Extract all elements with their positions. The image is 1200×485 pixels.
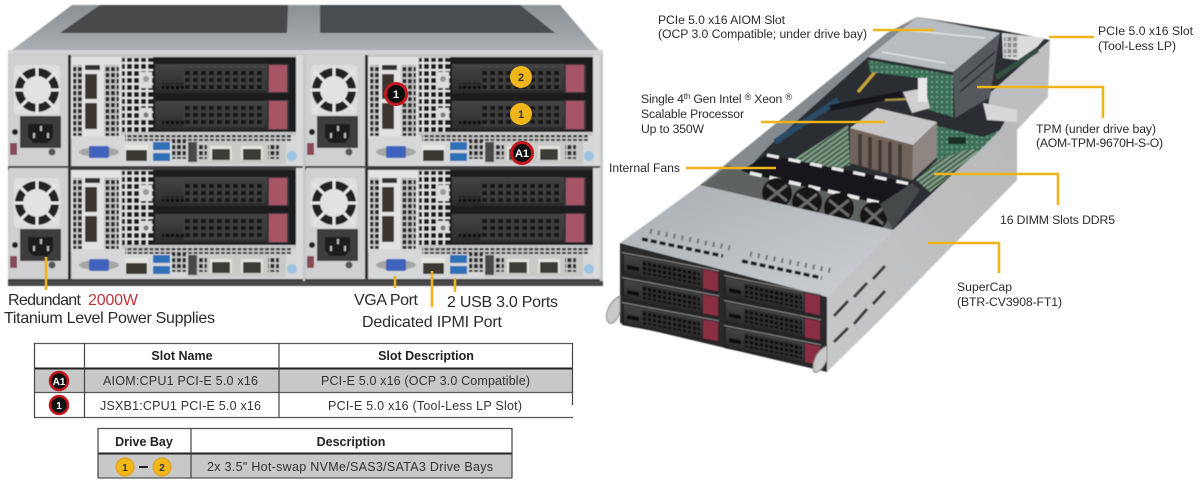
label: AIOM slot: (OCP 3.0 Compatible; under drive bay)	[658, 27, 867, 41]
front face	[620, 243, 827, 372]
open interior	[700, 17, 1050, 230]
leader: DIMM	[934, 174, 1058, 205]
label: TPM: TPM (under drive bay)	[1036, 122, 1156, 136]
row: A1: A1	[53, 377, 66, 388]
internal view callouts	[609, 13, 1194, 309]
cover vents	[642, 231, 833, 278]
motherboard	[937, 126, 1000, 160]
label: TPM	[1036, 122, 1163, 150]
badge: drive bay 1	[510, 103, 532, 125]
chassis rear frame	[8, 54, 603, 285]
tray	[622, 252, 719, 293]
label: power supplies: Redundant	[8, 292, 82, 309]
label: DIMM: 16 DIMM Slots DDR5	[1000, 213, 1115, 227]
DIMM bank: right	[916, 148, 978, 192]
row: 1: JSXB1:CPU1 PCI-E 5.0 x16	[100, 399, 261, 413]
rear wall	[987, 40, 1050, 130]
label: processor: Gen Intel	[690, 92, 745, 106]
label: power supplies: Titanium Level Power Supplies	[4, 310, 215, 327]
label: LP slot: PCIe 5.0 x16 Slot	[1098, 24, 1194, 38]
row: 1: 1	[56, 401, 62, 412]
leader: AIOM slot	[873, 29, 934, 31]
header: Description	[317, 435, 385, 449]
chassis top cover	[8, 5, 603, 55]
leader: LP slot	[1049, 36, 1094, 38]
tray	[724, 300, 821, 342]
leader: SuperCap	[928, 243, 999, 273]
tray	[622, 277, 719, 318]
server node: bottom left	[8, 168, 303, 283]
row: drive bays 1-2	[116, 458, 493, 476]
tray	[622, 302, 719, 343]
photo: server internal view	[606, 17, 1050, 372]
label: SuperCap: (BTR-CV3908-FT1)	[957, 295, 1062, 309]
leader: processor	[761, 121, 885, 123]
badge: LP slot 1: 1	[393, 89, 399, 101]
label: processor: Up to 350W	[641, 122, 704, 136]
header: Slot Description	[378, 349, 474, 363]
label: power supplies: 2000W	[88, 292, 139, 309]
leader: USB	[454, 278, 456, 292]
label: fans: Internal Fans	[609, 161, 680, 175]
row: drive bays 1-2: 2x 3.5" Hot-swap NVMe/SAS3/SATA3 Drive Bays	[207, 460, 493, 474]
leader: IPMI	[431, 271, 433, 307]
row: A1: AIOM:CPU1 PCI-E 5.0 x16	[103, 374, 258, 388]
drive trays: right column	[724, 275, 821, 367]
label: processor: Xeon	[751, 92, 786, 106]
photo: server rear view	[8, 5, 603, 286]
side wall	[827, 117, 1017, 372]
label: USB ports: 2 USB 3.0 Ports	[447, 294, 558, 311]
label: TPM: (AOM-TPM-9670H-S-O)	[1036, 136, 1163, 150]
drive trays: left column	[622, 252, 719, 343]
label: processor	[641, 92, 792, 136]
row: 1: PCI-E 5.0 x16 (Tool-Less LP Slot)	[328, 399, 522, 413]
tray	[724, 275, 821, 317]
badge: AIOM slot A1	[512, 142, 532, 164]
handles	[606, 296, 827, 372]
rear view callouts	[4, 257, 558, 331]
label: processor: th	[684, 92, 690, 101]
label: SuperCap	[957, 280, 1062, 309]
ribbon cable	[903, 78, 930, 113]
label: LP slot: (Tool-Less LP)	[1098, 39, 1176, 53]
badge: drive bay 2	[510, 66, 532, 88]
label: LP slot	[1098, 24, 1194, 53]
label: processor: Scalable Processor	[641, 107, 744, 121]
server node: top right	[305, 55, 600, 170]
rear mesh bracket	[1002, 33, 1045, 60]
drive cage with PCB	[868, 17, 1000, 118]
server node: top left	[8, 55, 303, 170]
interior left wall	[700, 17, 917, 185]
side wall vents	[834, 266, 885, 342]
badge: LP slot 1	[386, 84, 406, 104]
row: 1	[50, 396, 522, 414]
header: Slot Name	[151, 349, 213, 363]
label: VGA port: VGA Port	[354, 292, 419, 309]
label: processor: Single 4	[641, 92, 684, 106]
row: A1: PCI-E 5.0 x16 (OCP 3.0 Compatible)	[321, 374, 530, 388]
badge: AIOM slot A1: A1	[515, 148, 529, 160]
table: slots	[34, 343, 573, 418]
row: drive bays 1-2: 2	[159, 463, 165, 474]
leader: fans	[686, 167, 776, 169]
leader: power supply	[45, 257, 47, 290]
leader: TPM	[977, 87, 1103, 118]
interior cables	[775, 72, 940, 142]
rear view badges	[386, 66, 532, 164]
server node: bottom right	[305, 168, 600, 283]
leader: VGA	[394, 276, 396, 288]
label: processor: ®	[785, 92, 792, 102]
DIMM bank: left	[793, 124, 850, 178]
table: drive bays	[98, 428, 512, 478]
tray	[724, 325, 821, 367]
label: AIOM slot: PCIe 5.0 x16 AIOM Slot	[658, 13, 786, 27]
label: IPMI port: Dedicated IPMI Port	[362, 314, 503, 331]
header	[115, 435, 385, 449]
internal fans	[700, 155, 920, 230]
badge: drive bay 2: 2	[518, 72, 524, 84]
top cover	[620, 185, 893, 297]
row: A1	[50, 372, 530, 390]
header	[151, 349, 474, 363]
label: SuperCap: SuperCap	[957, 280, 1012, 294]
row: drive bays 1-2: 1	[122, 463, 128, 474]
label: power supplies	[4, 292, 215, 327]
badge: drive bay 1: 1	[518, 109, 524, 121]
label: processor: ®	[745, 92, 752, 102]
CPU heatsink	[850, 108, 937, 180]
label: AIOM slot	[658, 13, 867, 41]
header: Drive Bay	[115, 435, 173, 449]
